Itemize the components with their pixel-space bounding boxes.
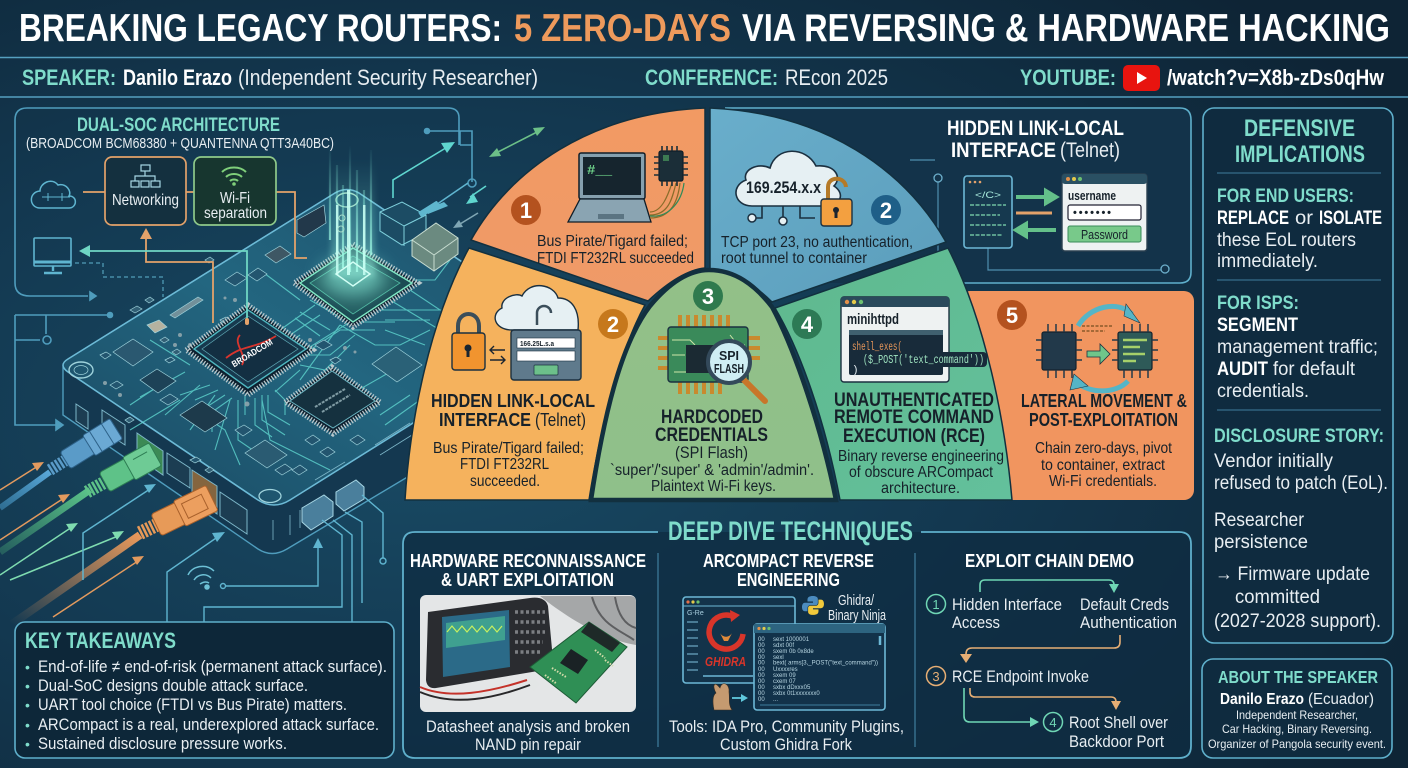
segment: unauthenticated RCE: EXECUTION (RCE) — [843, 426, 985, 447]
icon: minihttpd code window — [841, 297, 987, 382]
segment: hidden link-local interface: INTERFACE — [439, 409, 531, 430]
for end users: or — [1295, 208, 1314, 229]
icon: decompiler window: Uxxxxres — [773, 667, 798, 673]
step 3: 3 — [932, 669, 940, 684]
speaker info bar: SPEAKER: — [22, 65, 116, 90]
for ISPs: for default — [1273, 359, 1356, 380]
segment: unauthenticated RCE: architecture. — [881, 480, 960, 497]
segment: hidden link-local interface: FTDI FT232RL — [460, 456, 549, 473]
for ISPs: credentials. — [1217, 381, 1309, 402]
segment: hardcoded credentials — [591, 270, 836, 500]
chip: third IC — [285, 367, 380, 434]
column: ARCompact reverse engineering: ARCOMPACT REVERSE — [703, 550, 874, 571]
icon: cloud, padlock and login form: 166.25L.s.a — [520, 339, 555, 348]
for end users: these EoL routers — [1217, 230, 1356, 251]
segment: unauthenticated RCE: REMOTE COMMAND — [834, 407, 994, 428]
box: Networking: Networking — [112, 192, 179, 209]
board small parts — [69, 193, 422, 502]
blue cable — [0, 418, 123, 508]
icon: decompiler window: 00 — [758, 691, 765, 697]
icon: laptop with chip — [568, 146, 688, 222]
disclosure story: Researcher — [1214, 510, 1305, 531]
icon: cloud with IP and open lock: 169.254.x.x — [746, 178, 821, 197]
box: Wi-Fi separation: separation — [204, 205, 267, 222]
for ISPs: AUDIT — [1217, 359, 1268, 380]
architecture connectors — [79, 192, 307, 325]
panel: key takeaways: • — [25, 736, 30, 752]
step 2: Default Creds — [1080, 595, 1169, 614]
panel: about the speaker — [1202, 659, 1392, 758]
icon: decompiler window: 00 — [758, 679, 765, 685]
speaker info bar: YOUTUBE: — [1020, 65, 1116, 90]
segment: exploit 1 hardware: FTDI FT232RL succeeded — [537, 250, 694, 267]
icon: login window: username — [1068, 188, 1116, 203]
disclosure story: DISCLOSURE STORY: — [1214, 426, 1384, 447]
panel: key takeaways: • — [25, 659, 30, 675]
icon: Ghidra window: G-Re — [687, 610, 704, 617]
for end users: ISOLATE — [1319, 208, 1382, 229]
icon: Ghidra window: GHIDRA — [705, 654, 746, 669]
icon: decompiler window — [754, 624, 885, 710]
green cable — [0, 443, 162, 552]
speaker info bar: REcon 2025 — [785, 65, 888, 90]
icon: login window: Password — [1081, 228, 1128, 242]
box: Wi-Fi separation: Wi-Fi — [220, 190, 250, 207]
panel: key takeaways: • — [25, 678, 30, 694]
icon: decompiler window: bext( arms[3,_POST("text_command")) — [773, 660, 878, 666]
for ISPs: SEGMENT — [1217, 315, 1298, 336]
number badge 2: 2 — [607, 312, 619, 337]
column: ARCompact reverse engineering: Custom Ghidra Fork — [720, 735, 852, 754]
panel: key takeaways: Sustained disclosure pressure works. — [38, 734, 287, 753]
icon: decompiler window: sxem 0b 0x8de — [773, 649, 814, 655]
segment: lateral movement: LATERAL MOVEMENT & — [1021, 390, 1187, 411]
icon: minihttpd code window: minihttpd — [847, 311, 899, 328]
segment: unauthenticated RCE: UNAUTHENTICATED — [834, 390, 994, 411]
signal arrows — [0, 462, 156, 617]
panel: about the speaker: Danilo Erazo — [1220, 691, 1304, 708]
heading: DEEP DIVE TECHNIQUES — [668, 516, 913, 546]
segment: hidden link-local interface: Bus Pirate/Tigard failed; — [433, 440, 584, 457]
segment: hardcoded credentials: `super'/'super' & 'admin'/admin'. — [610, 462, 814, 479]
speaker info bar — [22, 65, 1385, 91]
ethernet ports — [76, 404, 412, 540]
column: exploit chain demo: EXPLOIT CHAIN DEMO — [965, 550, 1134, 571]
panel: key takeaways: Dual-SoC designs double attack surface. — [38, 676, 308, 695]
icon: decompiler window: sxbx 0t1xxxxxxx0 — [773, 691, 820, 697]
segment: exploit 1 hardware — [471, 108, 705, 301]
number badge 5: 5 — [1006, 303, 1018, 328]
icon: decompiler window: 00 — [758, 649, 765, 655]
chip: Broadcom SoC: BROADCOM — [230, 337, 274, 369]
chip: Quantenna SoC with glow — [294, 145, 418, 327]
segment: hidden link-local interface — [405, 248, 645, 500]
icon: analyst with arrow — [713, 684, 748, 710]
panel: orange exploit 5 backing — [960, 291, 1194, 500]
icon: wireless signal — [188, 566, 214, 589]
icon: cloud, padlock and login form — [452, 286, 581, 380]
board side face — [63, 300, 620, 554]
column: ARCompact reverse engineering: Tools: IDA Pro, Community Plugins, — [669, 717, 904, 736]
column: exploit chain demo — [926, 550, 1177, 751]
router circuit board illustration — [63, 145, 620, 554]
speaker info bar: Danilo Erazo — [123, 65, 232, 90]
icon: minihttpd code window: ) — [852, 365, 859, 377]
number badge 2: 2 — [880, 198, 892, 223]
number badge 4: 4 — [801, 312, 814, 337]
column: hardware reconnaissance — [410, 550, 646, 754]
icon: decompiler window: 00 — [758, 673, 765, 679]
step 4 — [1044, 712, 1168, 751]
box: Wi-Fi separation — [194, 157, 276, 225]
title — [19, 7, 1390, 50]
icon: cloud with IP and open lock — [736, 151, 852, 226]
panel: hidden link-local interface detail: HIDDEN LINK-LOCAL — [947, 117, 1124, 140]
SFP connectors — [302, 480, 364, 530]
segment: hidden link-local interface: (Telnet) — [535, 410, 586, 430]
icon: decompiler window: sxbx dDxxx05 — [773, 685, 811, 691]
column: hardware reconnaissance: NAND pin repair — [475, 735, 581, 754]
icon: decompiler window: 00 — [758, 667, 765, 673]
speaker info bar: (Independent Security Researcher) — [238, 65, 538, 90]
number badge 3 — [693, 281, 723, 311]
step 3: RCE Endpoint Invoke — [952, 667, 1089, 686]
icon: decompiler window: ... — [773, 697, 778, 703]
panel: defensive implications — [1203, 108, 1393, 643]
segment: hardcoded credentials: HARDCODED — [661, 407, 763, 428]
segment: exploit 2 link-local service — [710, 108, 946, 302]
icon: exchange arrows — [1016, 191, 1056, 236]
chip: Broadcom SoC — [186, 305, 313, 395]
flow arrows — [960, 580, 1121, 727]
disclosure story: refused to patch (EoL). — [1214, 473, 1388, 494]
title: 5 ZERO-DAYS — [514, 7, 731, 50]
blocks: connectors at the rear of the board — [380, 202, 458, 271]
step 1: Access — [952, 613, 1000, 632]
icon: python logo — [802, 596, 824, 615]
segment: unauthenticated RCE: Binary reverse engineering — [838, 448, 1004, 465]
icon: decompiler window: 00 — [758, 655, 765, 661]
step 1 — [926, 594, 1062, 632]
icon: laptop with chip: #__ — [587, 163, 613, 179]
step 4: Root Shell over — [1069, 713, 1168, 732]
orange cable — [12, 485, 218, 624]
for ISPs — [1217, 293, 1378, 402]
icon: decompiler window: sdxt 00f — [773, 643, 794, 649]
panel: defensive implications: IMPLICATIONS — [1235, 141, 1365, 168]
panel: hidden link-local interface detail: (Telnet) — [1060, 139, 1120, 162]
panel: about the speaker: Independent Researcher, — [1236, 708, 1358, 722]
icon: Ghidra window — [683, 597, 795, 683]
column: hardware reconnaissance: Datasheet analysis and broken — [426, 717, 630, 736]
panel: hidden link-local interface detail: INTERFACE — [951, 139, 1056, 162]
number badge 3: 3 — [702, 284, 714, 309]
icon: cloud — [31, 181, 75, 208]
icon: monitor — [34, 238, 163, 297]
panel: key takeaways: UART tool choice (FTDI vs Bus Pirate) matters. — [38, 695, 347, 714]
icon: code window: </C> — [975, 190, 1001, 200]
segment: exploit 2 link-local service: root tunnel to container — [721, 250, 867, 267]
panel: deep dive techniques — [403, 516, 1191, 758]
step 2 — [1080, 595, 1177, 632]
panel: about the speaker: Car Hacking, Binary Reversing. — [1222, 722, 1372, 736]
step 4: Backdoor Port — [1069, 732, 1164, 751]
icon: decompiler window: 00 — [758, 660, 765, 666]
photo: oscilloscope and green board — [420, 595, 636, 712]
title: BREAKING LEGACY ROUTERS: — [19, 7, 502, 50]
panel: key takeaways: KEY TAKEAWAYS — [25, 628, 176, 653]
panel: key takeaways: • — [25, 717, 30, 733]
circuit traces — [130, 260, 470, 470]
dual-SoC heading: (BROADCOM BCM68380 + QUANTENNA QTT3A40BC) — [26, 135, 334, 152]
dual-SoC heading: DUAL-SOC ARCHITECTURE — [77, 115, 280, 136]
disclosure story: persistence — [1214, 532, 1308, 553]
icon: decompiler window: 00 — [758, 637, 765, 643]
segment: hardcoded credentials: CREDENTIALS — [655, 425, 768, 446]
number badge 1 — [511, 195, 541, 225]
icon: code window — [964, 176, 1012, 248]
segment: hardcoded credentials: (SPI Flash) — [675, 443, 748, 462]
segment: exploit 1 hardware: Bus Pirate/Tigard failed; — [537, 233, 688, 250]
column: hardware reconnaissance: HARDWARE RECONNAISSANCE — [410, 550, 646, 571]
number badge 2 — [871, 195, 901, 225]
icon: decompiler window: 00 — [758, 643, 765, 649]
panel: about the speaker: ABOUT THE SPEAKER — [1218, 667, 1378, 687]
panel: hidden link-local interface detail — [725, 108, 1191, 283]
speaker info bar: CONFERENCE: — [645, 65, 778, 90]
dual-SoC heading — [26, 115, 334, 152]
segment: lateral movement — [997, 300, 1187, 490]
for ISPs: FOR ISPS: — [1217, 293, 1299, 314]
number badge 5 — [997, 300, 1027, 330]
number badge 4 — [792, 309, 822, 339]
icon: decompiler window: 00 — [758, 697, 765, 703]
for ISPs: management traffic; — [1217, 337, 1378, 358]
segment: exploit 2 link-local service: TCP port 23, no authentication, — [721, 234, 913, 251]
column: ARCompact reverse engineering: Ghidra/ — [838, 592, 875, 609]
column: ARCompact reverse engineering: ENGINEERING — [737, 569, 840, 590]
step 4: 4 — [1049, 715, 1057, 730]
column: ARCompact reverse engineering — [669, 550, 904, 754]
ethernet cables and arrows — [0, 418, 386, 624]
disclosure story — [1214, 426, 1388, 632]
column: hardware reconnaissance: & UART EXPLOITATION — [441, 569, 614, 590]
icon: SPI flash chip under magnifier: FLASH — [714, 362, 744, 376]
icon: decompiler window: sext 1000001 — [773, 637, 810, 643]
segment: unauthenticated RCE: of obscure ARCompact — [849, 464, 993, 481]
board top face — [63, 190, 556, 505]
panel: defensive implications: DEFENSIVE — [1244, 115, 1355, 142]
upper right signal arrows — [393, 127, 545, 228]
column: ARCompact reverse engineering: Binary Ninja — [828, 607, 886, 624]
step 2: Authentication — [1080, 613, 1177, 632]
icon: minihttpd code window: ($_POST('text_command')) — [863, 354, 984, 367]
segment: lateral movement: Chain zero-days, pivot — [1035, 440, 1172, 457]
panel: key takeaways: • — [25, 697, 30, 713]
icon: SPI flash chip under magnifier: SPI — [719, 349, 739, 363]
disclosure story: Vendor initially — [1214, 451, 1333, 472]
disclosure story: (2027-2028 support). — [1214, 611, 1381, 632]
step 1: 1 — [932, 597, 940, 612]
segment: lateral movement: to container, extract — [1041, 457, 1165, 474]
segment: hidden link-local interface: succeeded. — [470, 473, 540, 490]
lines from board to takeaways — [167, 495, 386, 622]
icon: minihttpd code window: shell_exes( — [852, 341, 902, 354]
icon: login window: ••••••• — [1073, 207, 1111, 219]
segment: lateral movement: Wi-Fi credentials. — [1049, 473, 1157, 490]
icon: decompiler window: 00 — [758, 685, 765, 691]
disclosure story: committed — [1235, 587, 1320, 608]
segment: lateral movement: POST-EXPLOITATION — [1029, 409, 1178, 430]
icon: decompiler window: sxem 09 — [773, 673, 796, 679]
icon: decompiler window: sexl — [773, 655, 784, 661]
icon: login window — [1062, 174, 1147, 251]
panel: dual-SoC architecture outline — [15, 108, 476, 430]
step 1: Hidden Interface — [952, 595, 1062, 614]
icon: chips with pivot arrows — [1036, 304, 1158, 391]
panel: key takeaways: End-of-life ≠ end-of-risk (permanent attack surface). — [38, 657, 387, 676]
segment: hardcoded credentials: Plaintext Wi-Fi keys. — [651, 478, 776, 495]
for end users: FOR END USERS: — [1217, 186, 1354, 207]
icon: SPI flash chip under magnifier — [658, 315, 765, 401]
panel: key takeaways: ARCompact is a real, underexplored attack surface. — [38, 715, 379, 734]
segment: unauthenticated RCE — [775, 248, 1012, 500]
panel: about the speaker: Organizer of Pangola security event. — [1208, 737, 1386, 751]
panel: key takeaways — [15, 622, 394, 758]
box: Networking — [105, 157, 186, 225]
number badge 1: 1 — [520, 198, 532, 223]
panel: about the speaker: (Ecuador) — [1308, 691, 1374, 708]
number badge 2 — [598, 309, 628, 339]
for end users: immediately. — [1217, 251, 1318, 272]
for end users — [1217, 186, 1382, 272]
for end users: REPLACE — [1217, 208, 1289, 229]
disclosure story: → Firmware update — [1215, 564, 1370, 585]
icon: decompiler window: cxem 07 — [773, 679, 796, 685]
segment: hidden link-local interface: HIDDEN LINK-LOCAL — [431, 390, 595, 411]
